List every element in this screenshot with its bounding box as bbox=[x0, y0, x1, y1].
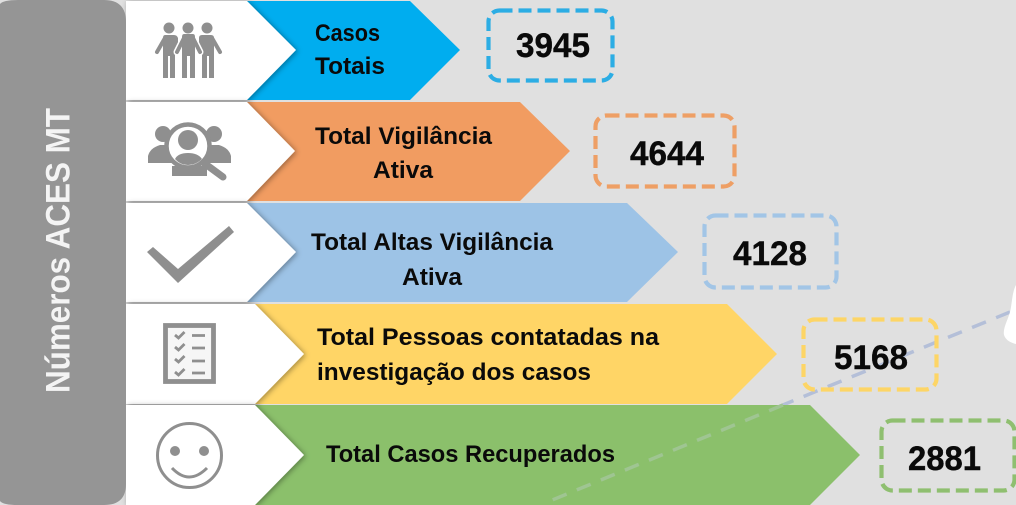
chevron: row 4 bbox=[126, 304, 304, 404]
value box: 3945: 3945 bbox=[516, 27, 590, 65]
label: total vigilancia ativa: Ativa bbox=[373, 157, 433, 184]
label: casos totais bbox=[315, 20, 385, 80]
label: total vigilancia ativa bbox=[315, 123, 492, 184]
label: total casos recuperados: Total Casos Recuperados bbox=[326, 441, 615, 468]
label: total pessoas contatadas bbox=[317, 324, 659, 386]
label: total pessoas contatadas: Total Pessoas contatadas na bbox=[317, 324, 659, 351]
arrow: casos totais bbox=[247, 1, 460, 100]
value box: 2881: 2881 bbox=[908, 440, 981, 478]
icon: check mark bbox=[147, 226, 234, 283]
value box: 2881 bbox=[882, 420, 1014, 490]
value box: 4128 bbox=[704, 216, 836, 288]
value box: 4128: 4128 bbox=[733, 235, 807, 273]
white blob at right edge bbox=[1004, 285, 1016, 344]
icon: three people bbox=[157, 22, 220, 78]
arrow: total casos recuperados bbox=[255, 405, 860, 505]
chevron: row 5 bbox=[126, 405, 304, 505]
label: total pessoas contatadas: investigação dos casos bbox=[317, 359, 591, 386]
icon: checklist bbox=[166, 326, 214, 382]
label: total altas vigilancia ativa bbox=[311, 229, 553, 291]
icon: magnifier over people bbox=[148, 124, 231, 177]
value box: 5168: 5168 bbox=[834, 339, 908, 377]
chevron: row 1 bbox=[126, 1, 296, 100]
chevron: row 3 bbox=[126, 203, 296, 302]
value box: 4644: 4644 bbox=[630, 135, 704, 173]
label: total altas vigilancia ativa: Ativa bbox=[402, 264, 462, 291]
side panel bbox=[0, 0, 126, 505]
arrow: total pessoas contatadas bbox=[255, 304, 777, 404]
icon: smiley bbox=[158, 424, 222, 488]
value box: 3945 bbox=[488, 10, 612, 80]
value box: 5168 bbox=[804, 320, 936, 390]
label: casos totais: Totais bbox=[315, 53, 385, 80]
arrow: total altas vigilancia ativa bbox=[247, 203, 678, 302]
label: total vigilancia ativa: Total Vigilância bbox=[315, 123, 492, 150]
faint line over green arrow bbox=[545, 405, 783, 503]
dashed connector line bbox=[712, 312, 1010, 434]
label: casos totais: Casos bbox=[315, 20, 380, 47]
chevron: row 2 bbox=[126, 102, 295, 201]
value box: 4644 bbox=[596, 116, 734, 186]
label: total altas vigilancia ativa: Total Altas Vigilância bbox=[311, 229, 553, 256]
arrow: total vigilancia ativa bbox=[247, 102, 570, 201]
side panel title: Números ACES MT bbox=[40, 108, 78, 393]
